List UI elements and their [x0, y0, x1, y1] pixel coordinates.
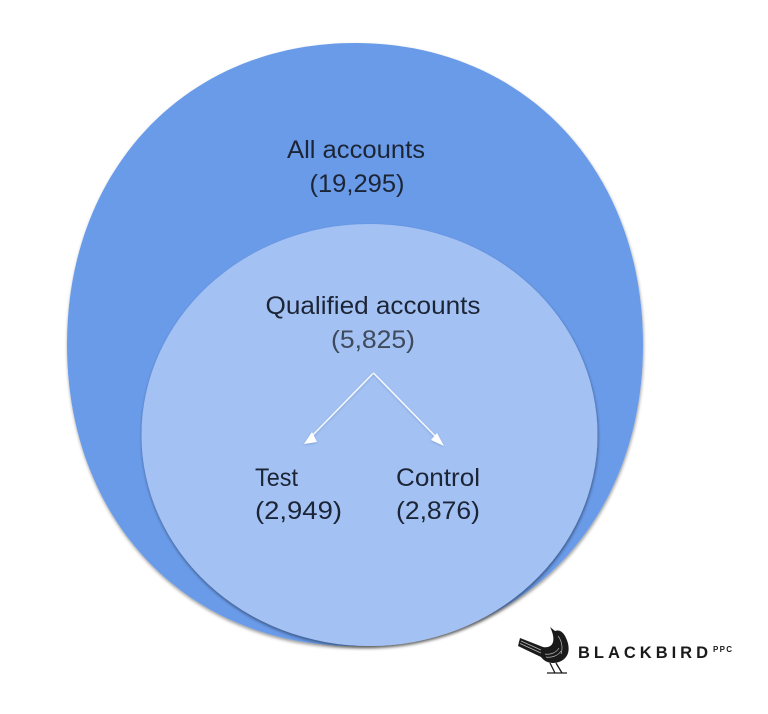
wordmark: BLACKBIRD	[578, 644, 708, 662]
label: control: Control	[396, 464, 480, 492]
label: control: (2,876)	[396, 497, 480, 525]
label: test	[255, 464, 342, 525]
label: all accounts: (19,295)	[310, 170, 404, 198]
label: qualified accounts: (5,825)	[331, 326, 415, 354]
icon: blackbird	[518, 627, 569, 673]
label: qualified accounts	[266, 292, 480, 354]
arrow: to control	[374, 373, 444, 446]
inner circle: qualified accounts	[142, 224, 598, 646]
arrow: to test	[304, 373, 374, 444]
label: test: (2,949)	[255, 497, 342, 525]
outer circle: all accounts	[67, 43, 643, 646]
label: all accounts	[287, 136, 425, 198]
logo: blackbird ppc: PPC	[713, 645, 732, 654]
logo: blackbird ppc	[518, 627, 732, 673]
label: test: Test	[255, 464, 298, 492]
label: qualified accounts: Qualified accounts	[266, 292, 480, 320]
label: all accounts: All accounts	[287, 136, 425, 164]
label: control	[396, 464, 480, 525]
